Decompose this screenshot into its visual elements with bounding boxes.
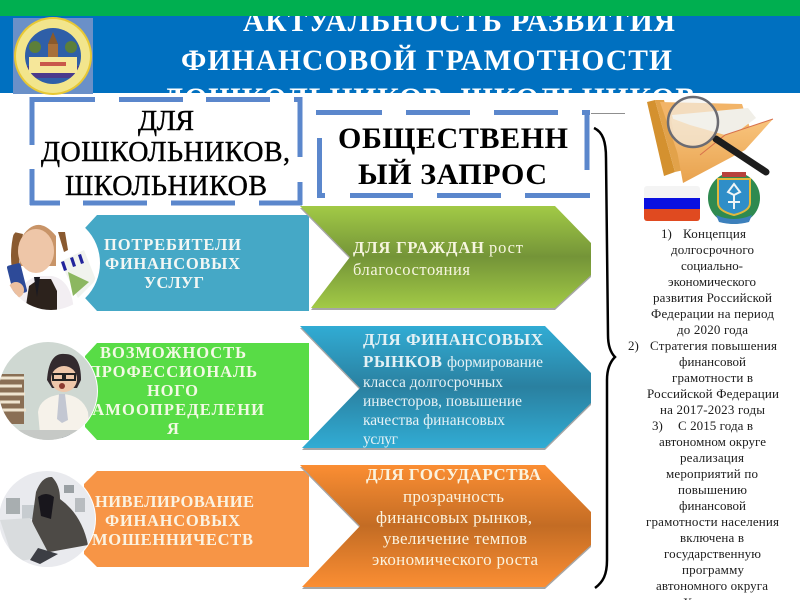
list of policy documents: экономического (668, 274, 756, 289)
row 3 left: leveling fraud: НИВЕЛИРОВАНИЕ (95, 492, 254, 511)
icon: folder with magnifier (647, 97, 773, 183)
icon: russian flag (644, 186, 700, 221)
arrow: for financial markets: услуг (363, 431, 398, 448)
list of policy documents: реализация (680, 450, 744, 465)
curly brace (594, 128, 615, 588)
list of policy documents: долгосрочного (671, 242, 754, 257)
title banner (0, 16, 800, 93)
arrow: for the state: экономического роста (372, 550, 538, 569)
box: for preschoolers and schoolchildren (30, 97, 302, 205)
arrow: for financial markets: ДЛЯ ФИНАНСОВЫХ (363, 330, 544, 349)
arrow: for financial markets: качества финансовых (363, 412, 505, 429)
arrow: for financial markets: формирование (447, 354, 543, 371)
arrow: for citizens: ДЛЯ ГРАЖДАН (353, 238, 484, 257)
list of policy documents: развития Российской (653, 290, 772, 305)
list of policy documents: на 2017-2023 годы (660, 402, 765, 417)
row 2 left: professional self-determination: ВОЗМОЖНОСТЬ (100, 343, 246, 362)
box: for preschoolers and schoolchildren: ДЛЯ (138, 106, 194, 137)
box: public demand: ЫЙ ЗАПРОС (358, 158, 547, 191)
list of policy documents: Стратегия повышения (650, 338, 777, 353)
title banner: ФИНАНСОВОЙ ГРАМОТНОСТИ (181, 44, 672, 77)
row 3 left: leveling fraud (84, 471, 309, 567)
logo emblem (13, 17, 93, 95)
box: public demand (316, 110, 590, 197)
arrow: for citizens (300, 206, 591, 310)
row 2 left: professional self-determination: Я (167, 419, 179, 438)
arrow: for the state: увеличение темпов (383, 529, 527, 548)
list of policy documents (628, 226, 779, 600)
row 3 left: leveling fraud: ФИНАНСОВЫХ (105, 511, 240, 530)
arrow: for the state: прозрачность (403, 487, 504, 506)
arrow: for the state: финансовых рынков, (376, 508, 532, 527)
list of policy documents: автономного округа (656, 578, 768, 593)
photo: girl with money (7, 224, 100, 310)
row 1 left: financial services consumers: ПОТРЕБИТЕЛИ (104, 235, 241, 254)
row 2 left: professional self-determination (80, 343, 309, 440)
icon: regional coat of arms (708, 172, 760, 224)
list of policy documents: 1) (661, 226, 672, 241)
list of policy documents: финансовой (679, 498, 746, 513)
arrow: for financial markets: инвесторов, повышение (363, 393, 522, 410)
arrow: for the state: ДЛЯ ГОСУДАРСТВА (366, 465, 542, 484)
list of policy documents: социально- (681, 258, 743, 273)
row 2 left: professional self-determination: НОГО (147, 381, 198, 400)
row 2 left: professional self-determination: ПРОФЕССИОНАЛЬ (88, 362, 257, 381)
row 1 left: financial services consumers: УСЛУГ (144, 273, 204, 292)
arrow: for the state (300, 465, 591, 589)
row 2 left: professional self-determination: САМООПРЕДЕЛЕНИ (80, 400, 264, 419)
arrow: for financial markets: класса долгосрочных (363, 374, 503, 391)
arrow: for financial markets: РЫНКОВ (363, 352, 442, 371)
list of policy documents: финансовой (679, 354, 746, 369)
arrow: for financial markets (300, 326, 591, 450)
row 1 left: financial services consumers: ФИНАНСОВЫХ (105, 254, 240, 273)
list of policy documents: мероприятий по (666, 466, 758, 481)
list of policy documents: программу (682, 562, 744, 577)
top green band (0, 0, 800, 16)
box: for preschoolers and schoolchildren: ШКОЛЬНИКОВ (65, 171, 267, 202)
box: public demand: ОБЩЕСТВЕНН (338, 122, 568, 155)
list of policy documents: 2) (628, 338, 639, 353)
list of policy documents: Федерации на период (651, 306, 774, 321)
list of policy documents: повышению (678, 482, 747, 497)
list of policy documents: 3) (652, 418, 663, 433)
row 3 left: leveling fraud: МОШЕННИЧЕСТВ (92, 530, 253, 549)
photo: girl with glasses at desk (0, 340, 100, 444)
row 1 left: financial services consumers (85, 215, 309, 311)
list of policy documents: Концепция (683, 226, 746, 241)
photo: hooded hacker with laptop (0, 470, 100, 570)
list of policy documents: автономном округе (659, 434, 766, 449)
box: for preschoolers and schoolchildren: ДОШКОЛЬНИКОВ, (41, 137, 290, 168)
thin top rule (591, 112, 625, 114)
title banner: АКТУАЛЬНОСТЬ РАЗВИТИЯ (243, 6, 675, 38)
title banner: ДОШКОЛЬНИКОВ, ШКОЛЬНИКОВ (163, 83, 695, 115)
list of policy documents: С 2015 года в (678, 418, 753, 433)
list of policy documents: до 2020 года (677, 322, 748, 337)
list of policy documents: грамотности в (672, 370, 753, 385)
arrow: for citizens: благосостояния (353, 260, 470, 279)
list of policy documents: включена в (680, 530, 744, 545)
list of policy documents: грамотности населения (646, 514, 779, 529)
list of policy documents: государственную (664, 546, 761, 561)
arrow: for citizens: рост (489, 238, 523, 257)
list of policy documents: Российской Федерации (647, 386, 779, 401)
